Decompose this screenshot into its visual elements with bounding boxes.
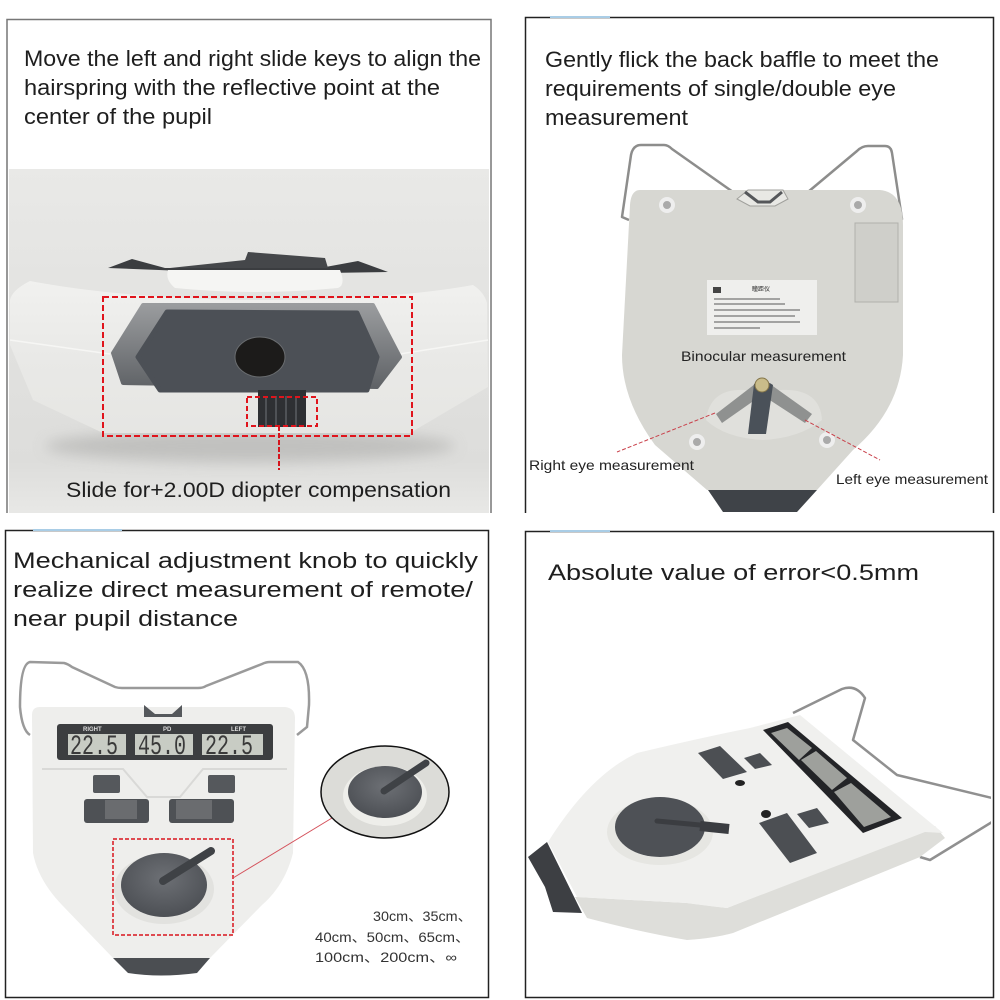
LCD readings: LEFT <box>231 727 246 733</box>
distance list: 100cm、200cm、∞ <box>315 950 457 965</box>
heading: slide keys: center of the pupil <box>24 104 212 129</box>
heading: knob: near pupil distance <box>13 606 238 631</box>
leader line <box>233 818 332 878</box>
top face <box>548 715 943 908</box>
bumper <box>528 842 582 913</box>
heading: knob: realize direct measurement of remote/ <box>13 577 474 602</box>
distance list: 30cm、35cm、 <box>373 909 472 924</box>
button upper <box>744 753 772 769</box>
lever <box>748 381 773 434</box>
panel: back baffle <box>524 16 995 517</box>
LCD readings: 45.0 <box>138 732 186 763</box>
button lower <box>797 808 829 828</box>
LCD readings: 22.5 <box>205 732 253 763</box>
heading: slide keys <box>24 46 481 129</box>
sticker: 瞳距仪 <box>752 285 770 293</box>
heading: knob <box>13 548 479 631</box>
panel: adjustment knob <box>6 529 488 998</box>
slider key lower <box>759 813 817 863</box>
dashed pointer <box>278 426 280 470</box>
heading: back baffle: measurement <box>545 105 689 130</box>
inner dark panel <box>138 312 377 390</box>
red dashed box <box>103 297 412 436</box>
ridge <box>42 769 287 797</box>
slide keys <box>84 799 234 823</box>
battery door <box>855 223 898 302</box>
LCD readings: 22.5 <box>70 732 118 763</box>
distance list <box>315 909 472 965</box>
LCD readings <box>68 727 263 763</box>
baffle slot <box>706 390 822 440</box>
wire handle <box>793 688 992 860</box>
label: right eye: Right eye measurement <box>529 457 694 473</box>
buttons <box>93 775 120 793</box>
distance list: 40cm、50cm、65cm、 <box>315 930 470 945</box>
panel: slide keys <box>5 20 494 517</box>
photo: device back view <box>617 145 903 512</box>
red dashed box <box>113 839 233 935</box>
panel: error <box>526 530 994 998</box>
binocular label: Binocular measurement <box>681 348 846 364</box>
back body <box>622 190 903 490</box>
LCD readings: RIGHT <box>83 727 102 733</box>
wire handle <box>622 145 902 220</box>
wire handle <box>20 662 309 735</box>
body <box>32 707 295 958</box>
caption: diopter: Slide for+2.00D diopter compensation <box>66 478 451 502</box>
clip <box>737 190 788 206</box>
display <box>57 724 273 760</box>
heading: back baffle: Gently flick the back baffle to meet the <box>545 47 939 72</box>
magnified knob callout <box>321 746 449 838</box>
gold pin <box>755 378 769 392</box>
photo: device front view <box>9 169 489 513</box>
pupil hole <box>235 337 285 377</box>
screws <box>661 199 864 448</box>
slider key <box>258 390 306 427</box>
heading: slide keys: Move the left and right slide keys to align the <box>24 46 481 71</box>
heading: knob: Mechanical adjustment knob to quickly <box>13 548 479 573</box>
outer bezel <box>113 305 400 387</box>
heading: error: Absolute value of error<0.5mm <box>548 560 919 585</box>
heading: back baffle: requirements of single/double eye <box>545 76 896 101</box>
photo: device angled view <box>528 688 992 940</box>
bumper <box>708 490 817 512</box>
bumper <box>113 958 210 976</box>
side face <box>575 826 945 940</box>
baffle arms <box>716 384 812 423</box>
red leader lines <box>617 413 880 460</box>
heading: slide keys: hairspring with the reflective point at the <box>24 75 440 100</box>
notch <box>144 705 182 717</box>
device front view <box>20 662 309 976</box>
sticker <box>707 280 817 335</box>
slider key upper <box>698 746 747 779</box>
heading: back baffle <box>545 47 939 130</box>
LCD readings: PD <box>163 727 172 733</box>
label: left eye: Left eye measurement <box>836 471 988 487</box>
dial <box>607 797 729 865</box>
display <box>763 722 902 833</box>
dial <box>114 851 214 924</box>
